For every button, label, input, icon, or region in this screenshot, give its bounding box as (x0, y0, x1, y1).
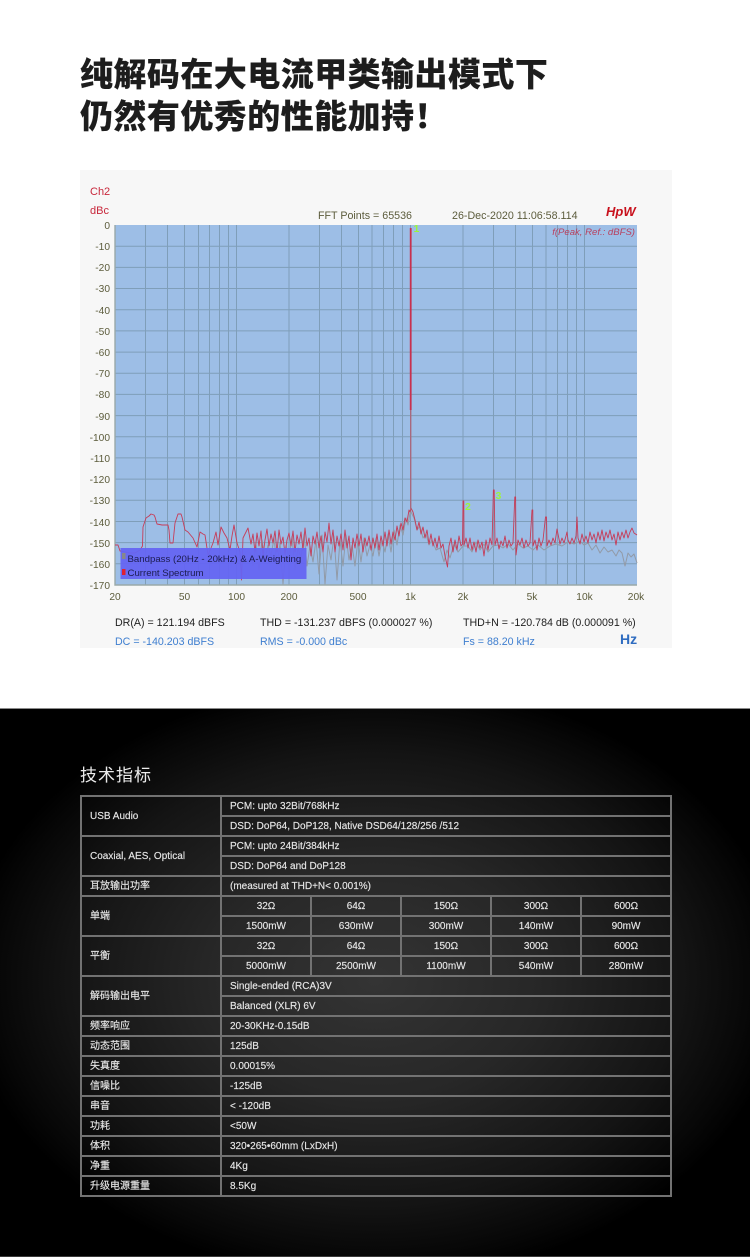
row: dimensions: 320•265•60mm (LxDxH) (230, 1140, 338, 1152)
row: balanced power: 1100mW (426, 960, 466, 972)
row: power consumption (90, 1120, 256, 1132)
row: dynamic range: 动态范围 (90, 1040, 130, 1052)
measurement results: THD+N = -120.784 dB (0.000091 %) (463, 617, 636, 629)
title (80, 56, 548, 135)
row: upgraded PSU weight (90, 1180, 256, 1192)
row: dynamic range: 125dB (230, 1040, 259, 1052)
row: distortion: 失真度 (90, 1060, 120, 1072)
row: balanced impedance: 32Ω (257, 940, 275, 952)
row: SNR (90, 1080, 262, 1092)
row: single-ended impedance: 单端 (90, 910, 110, 922)
y axis labels: -40 (95, 306, 110, 317)
measurement results (115, 617, 636, 629)
heading: 技术指标 (80, 766, 152, 785)
channel labels (90, 186, 110, 217)
row: dynamic range (90, 1040, 259, 1052)
y axis labels: 0 (104, 221, 110, 232)
y axis labels: -80 (95, 390, 110, 401)
Hz axis unit: Hz (620, 631, 637, 647)
row: power consumption: 功耗 (90, 1120, 110, 1132)
row: Coaxial PCM: PCM: upto 24Bit/384kHz (230, 840, 340, 852)
x axis labels: 2k (458, 592, 469, 603)
chart header text (318, 210, 578, 222)
channel labels: dBc (90, 205, 109, 217)
x axis labels: 5k (527, 592, 538, 603)
harmonic markers: 1 (414, 223, 420, 235)
row: net weight: 净重 (90, 1160, 110, 1172)
row: balanced impedance: 平衡 (90, 950, 110, 962)
harmonic markers: 2 (465, 501, 471, 513)
channel labels: Ch2 (90, 186, 110, 198)
y axis labels: -10 (95, 242, 110, 253)
x axis labels: 10k (576, 592, 594, 603)
chart header text: 26-Dec-2020 11:06:58.114 (452, 210, 578, 222)
x axis labels: 100 (228, 592, 245, 603)
panel: FFT spectrum chart (80, 170, 672, 648)
row: single-ended power: 300mW (429, 920, 463, 932)
y axis labels: -160 (90, 560, 110, 571)
x axis labels (109, 592, 645, 603)
panel: technical specifications (0, 708, 750, 1257)
row: single-ended power: 140mW (519, 920, 553, 932)
row: output level XLR: Balanced (XLR) 6V (230, 1000, 316, 1012)
row: balanced power: 5000mW (246, 960, 286, 972)
row: balanced power: 280mW (609, 960, 643, 972)
row: USB Audio PCM (90, 800, 644, 1192)
row: power consumption: <50W (230, 1120, 256, 1132)
secondary measurements: DC = -140.203 dBFS (115, 636, 214, 648)
row: crosstalk (90, 1100, 271, 1112)
row: single-ended impedance: 300Ω (524, 900, 548, 912)
title: 仍然有优秀的性能加持！ (80, 98, 448, 135)
row: SNR: -125dB (230, 1080, 262, 1092)
y axis labels: -170 (90, 581, 110, 592)
x axis labels: 500 (350, 592, 367, 603)
row: upgraded PSU weight: 8.5Kg (230, 1180, 256, 1192)
row: output level RCA: 解码输出电平 (90, 990, 150, 1002)
HpW logo: HpW (606, 204, 637, 219)
row: net weight: 4Kg (230, 1160, 248, 1172)
harmonic markers: 3 (496, 490, 502, 502)
y axis labels: -140 (90, 518, 110, 529)
row: distortion: 0.00015% (230, 1060, 275, 1072)
row: balanced impedance: 150Ω (434, 940, 458, 952)
chart header text: FFT Points = 65536 (318, 210, 412, 222)
y axis labels: -60 (95, 348, 110, 359)
row: single-ended impedance: 600Ω (614, 900, 638, 912)
row: upgraded PSU weight: 升级电源重量 (90, 1180, 150, 1192)
secondary measurements (115, 636, 535, 648)
row: balanced impedance: 300Ω (524, 940, 548, 952)
row: crosstalk: 串音 (90, 1100, 110, 1112)
row: USB Audio DSD: DSD: DoP64, DoP128, Native DSD64/128/256 /512 (230, 820, 459, 832)
row: dimensions (90, 1140, 338, 1152)
x axis labels: 50 (179, 592, 190, 603)
row: single-ended impedance: 64Ω (347, 900, 365, 912)
y axis labels: -150 (90, 539, 110, 550)
legend box (120, 548, 306, 579)
row: single-ended power (246, 920, 640, 932)
y axis labels: -70 (95, 369, 110, 380)
y axis labels: -50 (95, 327, 110, 338)
y axis labels (90, 221, 110, 592)
row: balanced power: 540mW (519, 960, 553, 972)
row: single-ended impedance: 32Ω (257, 900, 275, 912)
reference spectrum trace (grey) (250, 510, 637, 584)
row: balanced impedance (90, 940, 638, 962)
row: output level RCA: Single-ended (RCA)3V (230, 980, 332, 992)
x axis labels: 20k (628, 592, 645, 603)
y axis labels: -20 (95, 263, 110, 274)
row: Coaxial PCM (90, 840, 340, 862)
x axis labels: 1k (405, 592, 417, 603)
row: single-ended impedance: 150Ω (434, 900, 458, 912)
row: single-ended power: 630mW (339, 920, 373, 932)
row: balanced impedance: 600Ω (614, 940, 638, 952)
row: frequency response: 频率响应 (90, 1020, 130, 1032)
row: balanced power: 2500mW (336, 960, 376, 972)
row: output level RCA (90, 980, 332, 1002)
row: USB Audio PCM: USB Audio (90, 810, 138, 822)
legend box: Bandpass (20Hz - 20kHz) & A-Weighting (128, 554, 301, 565)
row: headphone power: (measured at THD+N< 0.001%) (230, 880, 371, 892)
current spectrum trace (red) (115, 490, 637, 580)
secondary measurements: RMS = -0.000 dBc (260, 636, 348, 648)
row: frequency response: 20-30KHz-0.15dB (230, 1020, 310, 1032)
row: headphone power: 耳放输出功率 (90, 880, 150, 892)
row: crosstalk: < -120dB (230, 1100, 271, 1112)
secondary measurements: Fs = 88.20 kHz (463, 636, 535, 648)
row: balanced impedance: 64Ω (347, 940, 365, 952)
peak reference note: f(Peak, Ref.: dBFS) (552, 227, 635, 238)
row: single-ended impedance (90, 900, 638, 922)
measurement results: DR(A) = 121.194 dBFS (115, 617, 225, 629)
1 kHz fundamental peak (410, 228, 412, 510)
row: Coaxial DSD: DSD: DoP64 and DoP128 (230, 860, 346, 872)
row: headphone power (90, 880, 371, 892)
row: dimensions: 体积 (90, 1140, 110, 1152)
measurement results: THD = -131.237 dBFS (0.000027 %) (260, 617, 432, 629)
row: single-ended power: 1500mW (246, 920, 286, 932)
row: single-ended power: 90mW (612, 920, 640, 932)
legend box: Current Spectrum (128, 568, 203, 579)
row: balanced power (246, 960, 644, 972)
y axis labels: -120 (90, 475, 110, 486)
y axis labels: -100 (90, 433, 110, 444)
row: SNR: 信噪比 (90, 1080, 120, 1092)
plot area background (115, 225, 637, 585)
x axis labels: 20 (109, 592, 121, 603)
title: 纯解码在大电流甲类输出模式下 (80, 56, 548, 93)
row: USB Audio PCM: PCM: upto 32Bit/768kHz (230, 800, 340, 812)
harmonic markers (414, 223, 502, 513)
y axis labels: -90 (95, 412, 110, 423)
row: net weight (90, 1160, 248, 1172)
y axis labels: -130 (90, 496, 110, 507)
y axis labels: -30 (95, 284, 110, 295)
y axis labels: -110 (90, 454, 110, 465)
row: Coaxial PCM: Coaxial, AES, Optical (90, 850, 185, 862)
specifications table (80, 795, 672, 1197)
row: distortion (90, 1060, 275, 1072)
x axis labels: 200 (280, 592, 298, 603)
row: frequency response (90, 1020, 310, 1032)
